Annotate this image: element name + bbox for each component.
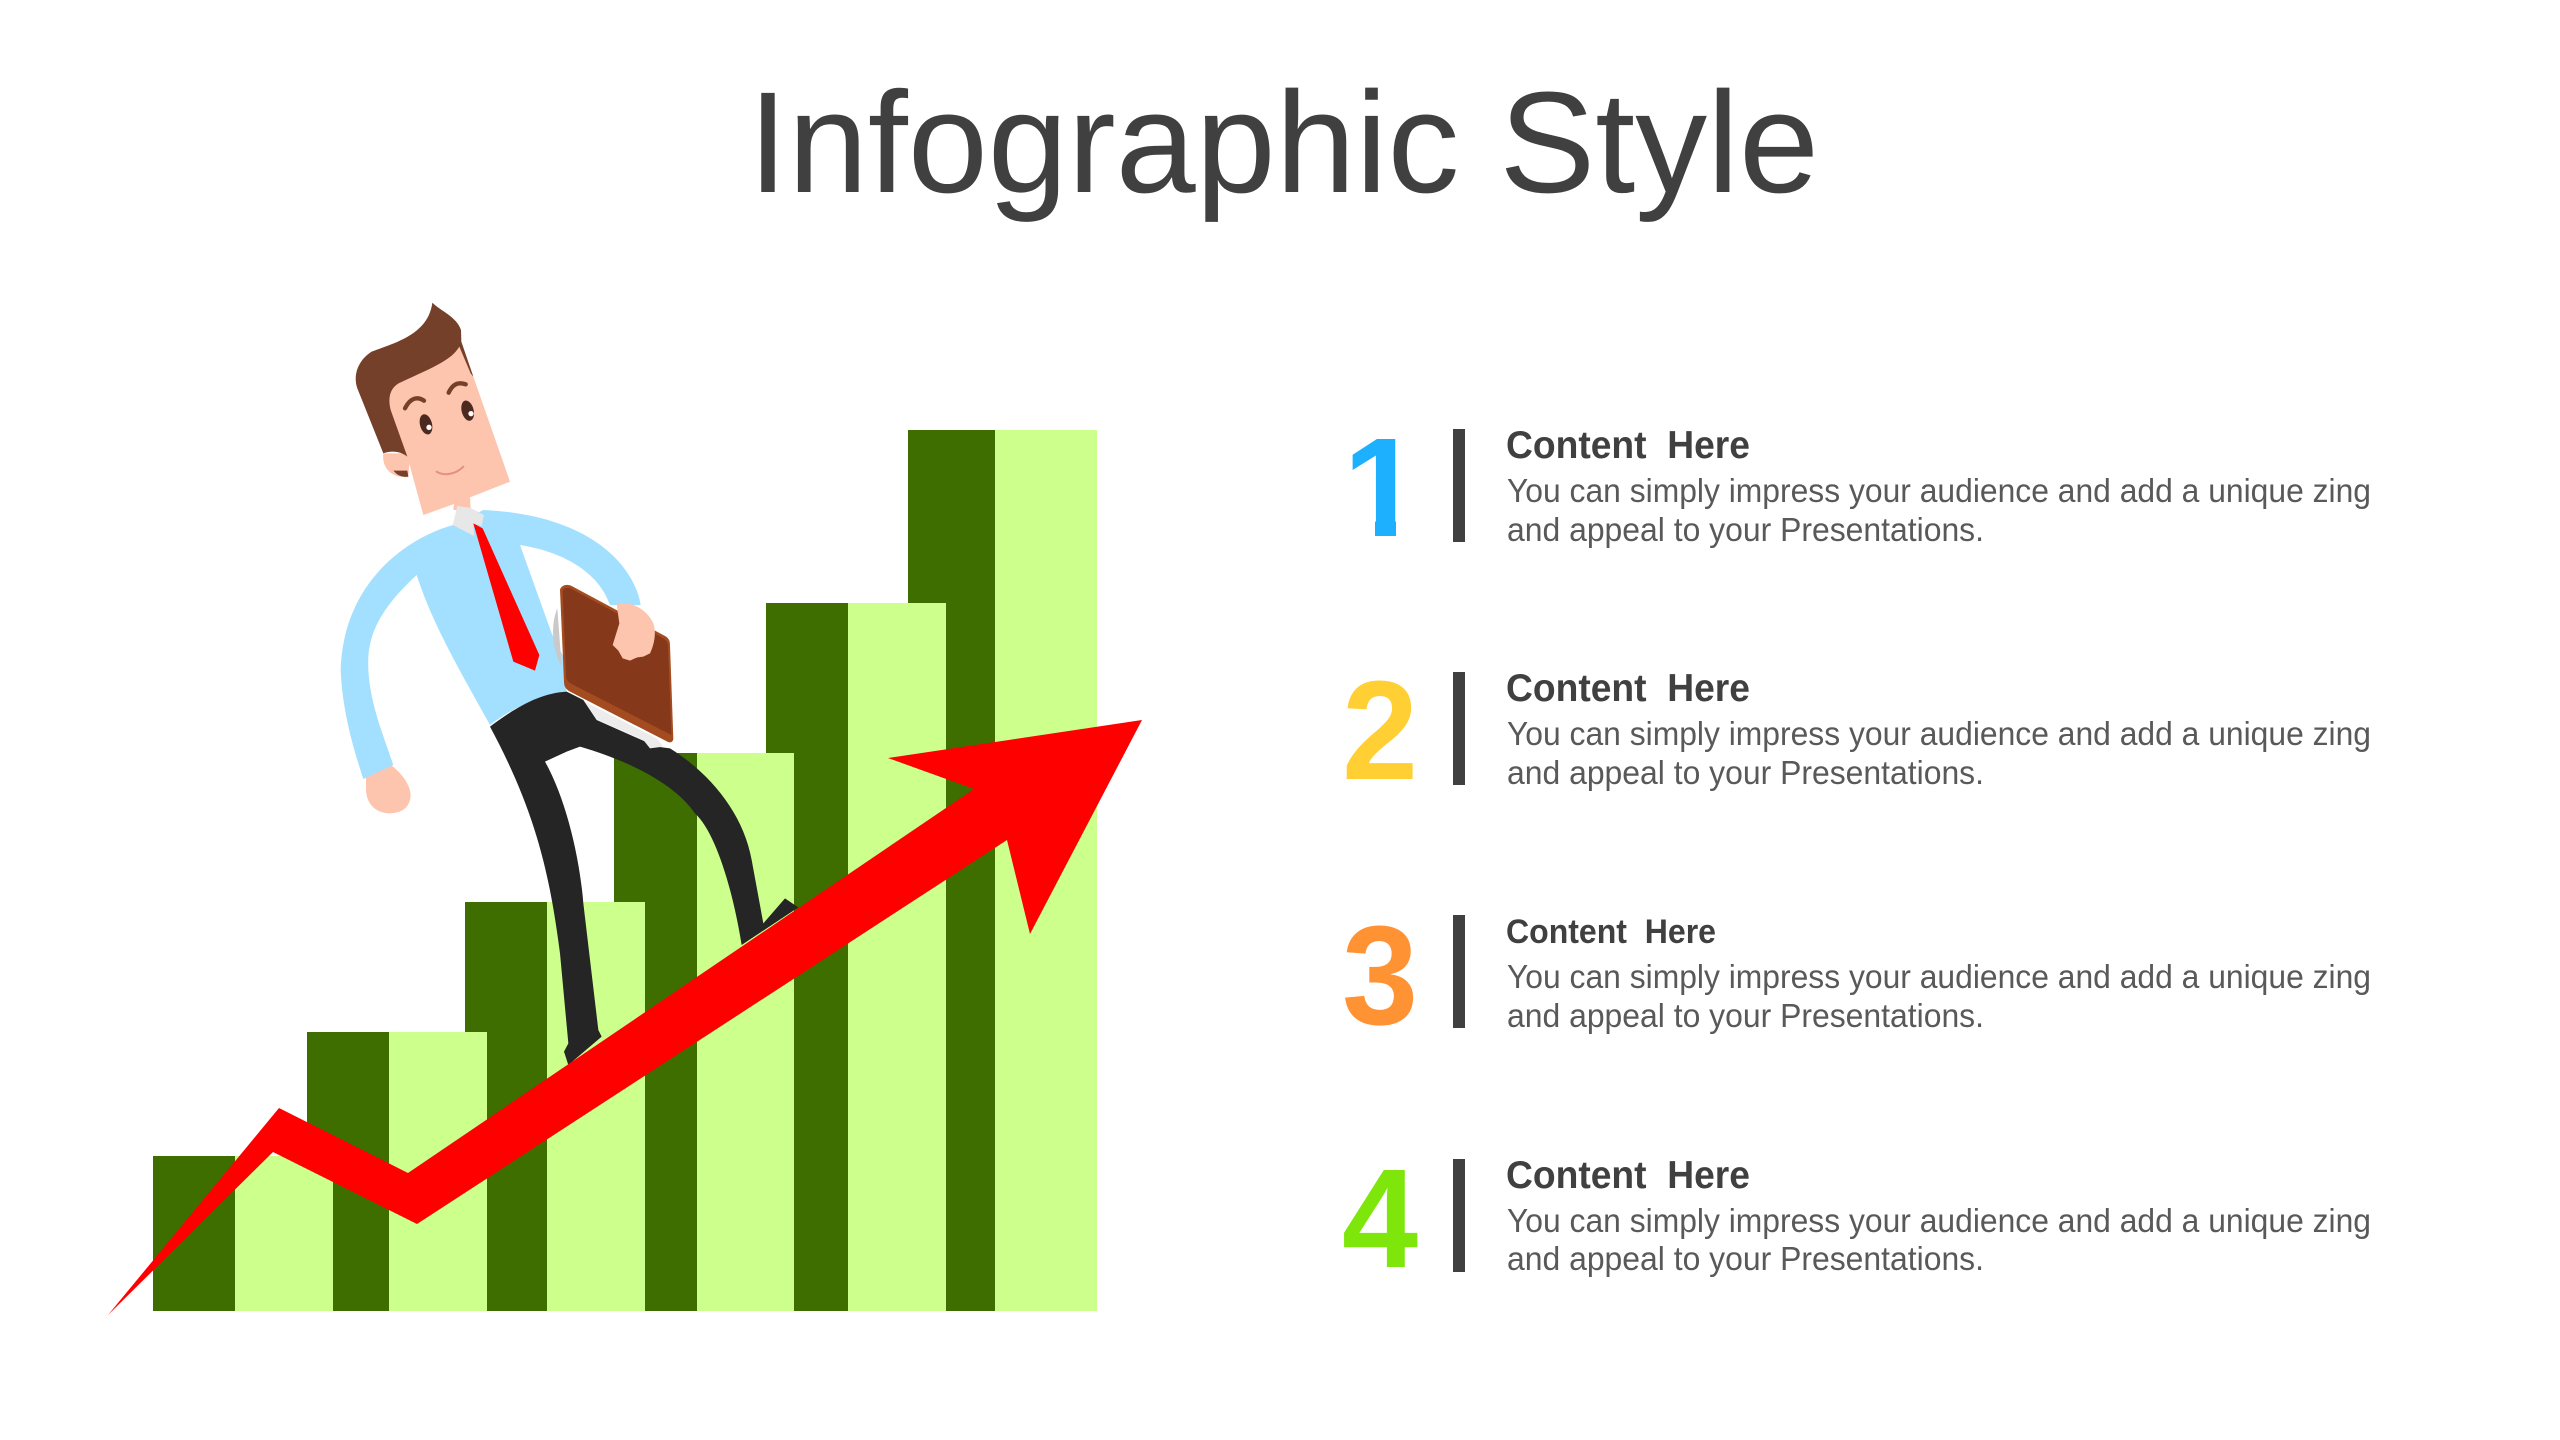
list item 3 (1342, 897, 2371, 1054)
list item 1 (1352, 429, 2369, 548)
body text 3: You can simply impress your audience and add a unique zing (1507, 958, 2371, 995)
body text 1: and appeal to your Presentations. (1507, 511, 1984, 548)
left hand (366, 765, 411, 813)
hair (356, 303, 473, 457)
collar (453, 506, 484, 536)
body text 4: and appeal to your Presentations. (1507, 1240, 1984, 1277)
eyebrows (405, 383, 466, 408)
tie (473, 523, 539, 671)
body text 3: and appeal to your Presentations. (1507, 997, 1984, 1034)
divider bar 3 (1453, 915, 1465, 1028)
shirt (341, 510, 641, 779)
heading 1: Content Here (1506, 424, 1750, 467)
heading 2: Content Here (1506, 667, 1750, 710)
list item 4 (1342, 1140, 2371, 1297)
mouth (437, 467, 463, 474)
bar 5 (766, 603, 946, 1311)
heading 3: Content Here (1506, 913, 1716, 951)
bar 4 (614, 753, 794, 1311)
ear (383, 453, 410, 477)
list item 2 (1342, 652, 2371, 809)
shirt sliver under briefcase (585, 702, 663, 748)
title: Infographic Style (748, 62, 1819, 223)
body text 4: You can simply impress your audience and add a unique zing (1507, 1202, 2371, 1239)
divider bar 4 (1453, 1159, 1465, 1272)
number 1: 1 (1343, 408, 1421, 566)
businessman figure (341, 303, 798, 1065)
trousers (490, 692, 798, 1065)
number 3: 3 (1342, 897, 1418, 1054)
divider bar 1 (1453, 429, 1465, 542)
number 4: 4 (1342, 1140, 1418, 1297)
heading 4: Content Here (1506, 1154, 1750, 1197)
divider bar 2 (1453, 672, 1465, 785)
briefcase (553, 585, 673, 742)
right hand (613, 603, 655, 661)
bar 6 (908, 430, 1097, 1311)
bar 3 (465, 902, 645, 1311)
body text 2: You can simply impress your audience and add a unique zing (1507, 715, 2371, 752)
bar 1 (153, 1156, 333, 1311)
face and neck (387, 343, 510, 515)
eyes (418, 399, 476, 436)
number 2: 2 (1342, 652, 1418, 809)
bar chart (153, 430, 1097, 1311)
red growth arrow (108, 720, 1142, 1315)
bar 2 (307, 1032, 487, 1311)
body text 2: and appeal to your Presentations. (1507, 754, 1984, 791)
body text 1: You can simply impress your audience and add a unique zing (1507, 472, 2371, 509)
